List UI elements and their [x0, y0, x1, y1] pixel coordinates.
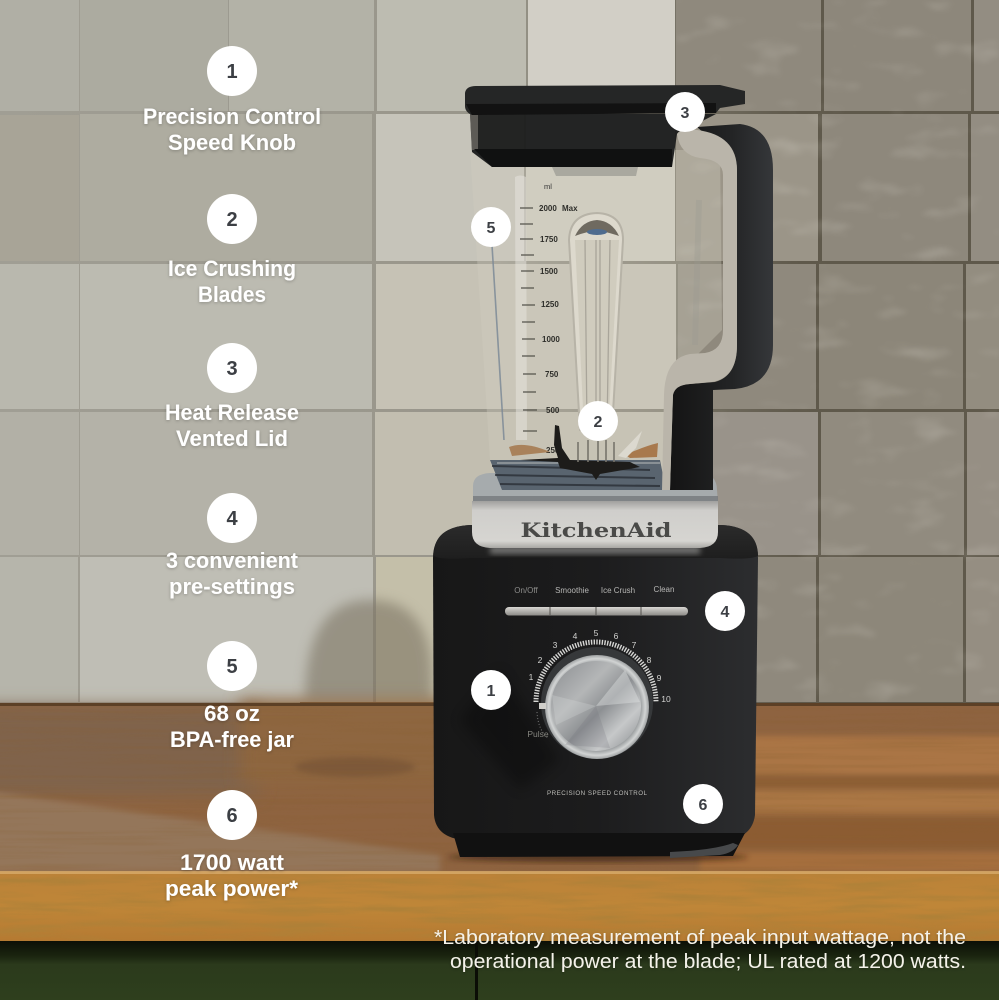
- jar graduation scale: 1000: [542, 335, 560, 344]
- feature 3: Heat Release: [165, 400, 299, 425]
- feature 5: 5: [226, 656, 238, 678]
- footnote: *Laboratory measurement of peak input wattage, not the: [434, 927, 966, 949]
- marker 4: settings: 4: [721, 604, 730, 621]
- feature 2: Blades: [198, 282, 266, 307]
- marker 4: settings: [705, 591, 745, 631]
- button labels: Smoothie: [555, 586, 589, 595]
- dial numbers: 9: [657, 673, 662, 683]
- blender: [433, 85, 773, 862]
- feature 5: [170, 641, 294, 752]
- marker 1: knob: 1: [487, 683, 496, 700]
- jar handle: [662, 124, 773, 490]
- jar graduation scale: 1500: [540, 267, 558, 276]
- feature 6: [165, 790, 298, 901]
- jar rim and water line base: [473, 460, 718, 503]
- feature 2: 2: [226, 209, 238, 231]
- dial numbers: 7: [632, 640, 637, 650]
- marker 6: power: 6: [699, 797, 708, 814]
- speed dial: [527, 628, 671, 759]
- feature 6: 1700 watt: [180, 850, 285, 875]
- background: tiled wall: [0, 0, 999, 706]
- marker 2: blades: [578, 401, 618, 441]
- jar graduation scale: 250: [546, 446, 560, 455]
- blades: [509, 425, 658, 480]
- feature 1: 1: [226, 61, 238, 83]
- jar lid: [465, 85, 745, 176]
- feature 2: Ice Crushing: [168, 256, 296, 281]
- feature 1: [143, 46, 321, 155]
- footnote: operational power at the blade; UL rated at 1200 watts.: [450, 951, 966, 973]
- jar graduation scale: ml: [544, 182, 552, 191]
- feature 6: 6: [226, 805, 238, 827]
- dial numbers: 3: [553, 640, 558, 650]
- product callout markers: [471, 92, 745, 824]
- jar graduation scale: Max: [562, 204, 578, 213]
- feature 5: BPA-free jar: [170, 727, 294, 752]
- dial numbers: 1: [529, 672, 534, 682]
- feature 2: [168, 194, 296, 307]
- dial numbers: Pulse: [527, 729, 549, 739]
- dial numbers: 5: [594, 628, 599, 638]
- wooden counter top: [0, 700, 999, 875]
- feature 3: Vented Lid: [176, 426, 288, 451]
- marker 2: blades: 2: [594, 414, 603, 431]
- left feature list: [143, 46, 321, 901]
- jar graduation scale: 1250: [541, 300, 559, 309]
- marker 3: lid: [665, 92, 705, 132]
- counter front edge: [0, 871, 999, 941]
- marker 3: lid: 3: [681, 105, 690, 122]
- dial numbers: 8: [647, 655, 652, 665]
- marker 5: jar: 5: [487, 220, 496, 237]
- button labels: Ice Crush: [601, 586, 635, 595]
- marker 5: jar: [471, 207, 511, 247]
- inner jar column: [569, 213, 623, 430]
- jar graduation scale: 1750: [540, 235, 558, 244]
- dial numbers: [527, 628, 671, 739]
- feature 4: 4: [226, 508, 238, 530]
- footnote: [434, 927, 966, 973]
- marker 6: power: [683, 784, 723, 824]
- base caption: PRECISION SPEED CONTROL: [547, 790, 648, 797]
- marker 1: knob: [471, 670, 511, 710]
- metal collar with brand: [472, 501, 718, 548]
- jar graduation scale: 2000: [539, 204, 557, 213]
- dial numbers: 10: [661, 694, 671, 704]
- button labels: On/Off: [514, 586, 538, 595]
- brand name: KitchenAid: [520, 518, 672, 542]
- feature 1: Speed Knob: [168, 130, 296, 155]
- jar graduation scale: [520, 182, 578, 455]
- dial numbers: 2: [538, 655, 543, 665]
- feature 5: 68 oz: [204, 701, 260, 726]
- feature 3: 3: [226, 358, 238, 380]
- jar graduation scale: 750: [545, 370, 559, 379]
- feature 4: 3 convenient: [166, 548, 299, 573]
- dial numbers: 6: [614, 631, 619, 641]
- feature 4: pre-settings: [169, 574, 295, 599]
- motor base: [433, 525, 758, 858]
- feature 1: Precision Control: [143, 104, 321, 129]
- feature 6: peak power*: [165, 876, 298, 901]
- feature 4: [166, 493, 299, 599]
- blender jar: [465, 85, 773, 503]
- button labels: Clean: [654, 585, 674, 594]
- feature 3: [165, 343, 299, 451]
- jar graduation scale: 500: [546, 406, 560, 415]
- green cabinet below counter: [0, 941, 999, 1000]
- button labels: [514, 585, 674, 595]
- dial numbers: 4: [573, 631, 578, 641]
- control buttons: [505, 585, 688, 616]
